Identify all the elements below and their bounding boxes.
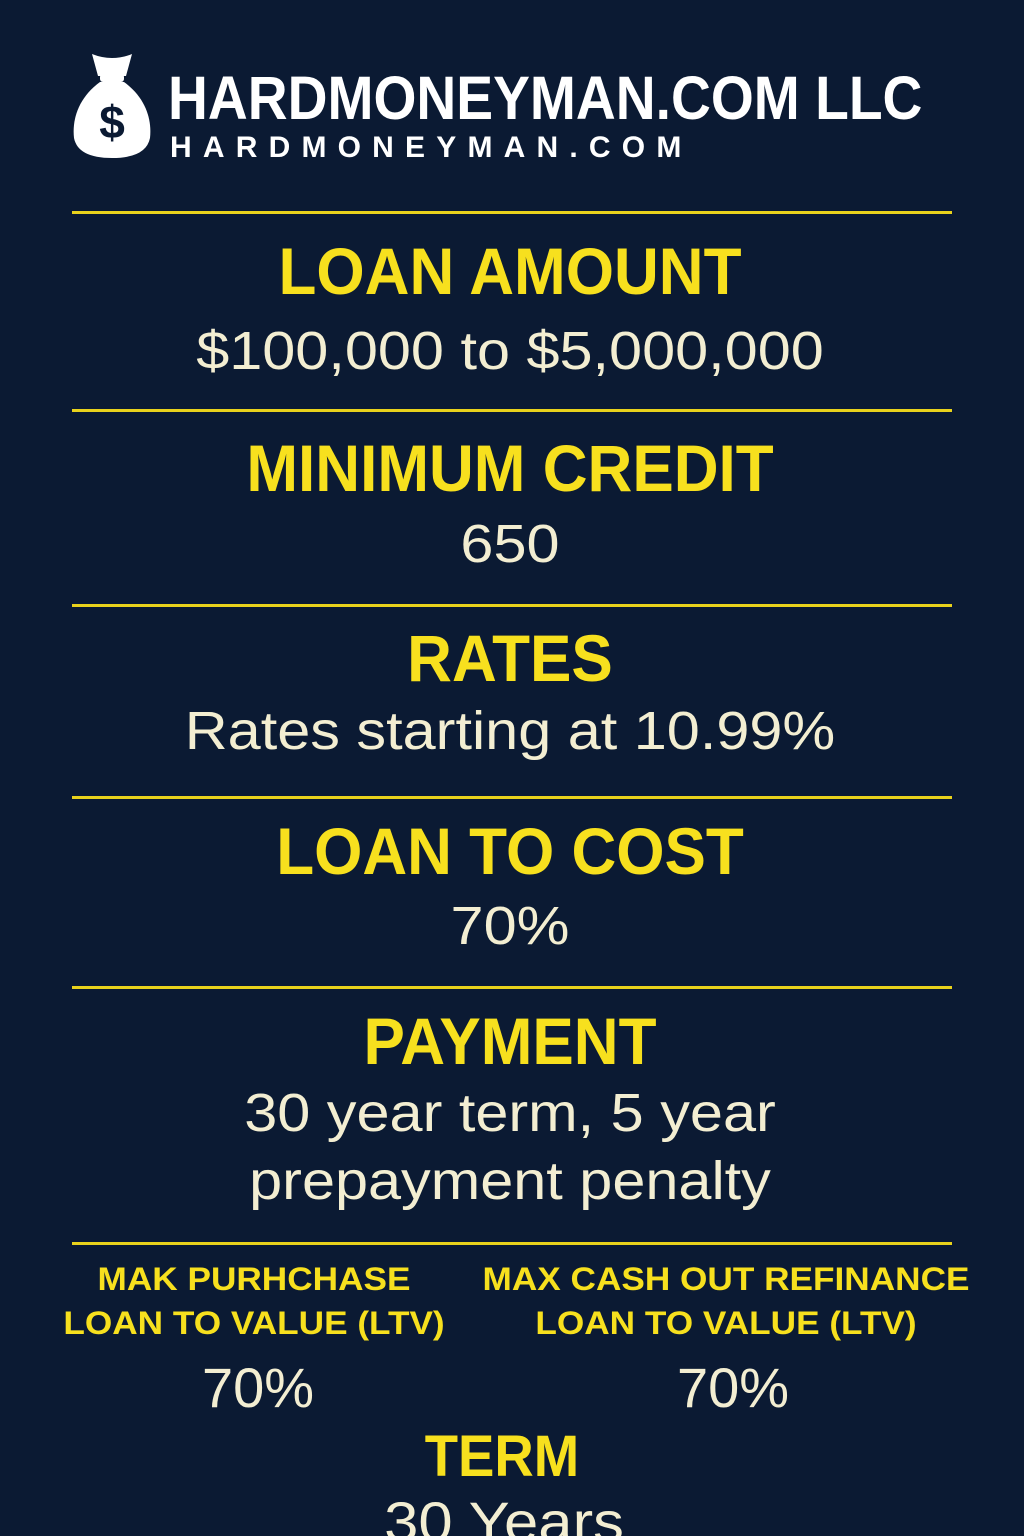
section: loan to cost: LOAN TO COST	[276, 814, 744, 888]
section: loan amount: LOAN AMOUNT	[279, 234, 741, 308]
value: payment	[244, 1083, 776, 1211]
refinance LTV value: 70%	[677, 1356, 789, 1419]
section: payment: PAYMENT	[363, 1004, 657, 1078]
refinance LTV heading: MAX CASH OUT REFINANCE	[483, 1261, 969, 1297]
section: minimum credit: MINIMUM CREDIT	[246, 431, 774, 505]
purchase LTV value: 70%	[202, 1356, 314, 1419]
subtitle: HARDMONEYMAN.COM	[170, 131, 693, 164]
section: rates: RATES	[407, 621, 613, 695]
purchase LTV heading: LOAN TO VALUE (LTV)	[63, 1305, 445, 1341]
icon: money bag: $	[99, 96, 125, 148]
title: HARDMONEYMAN.COM LLC	[168, 64, 922, 132]
section: term: TERM	[425, 1424, 579, 1489]
value: payment: prepayment penalty	[249, 1151, 771, 1211]
value: 650: 650	[460, 514, 560, 574]
value: 70%: 70%	[451, 896, 569, 956]
purchase LTV heading: MAK PURHCHASE	[98, 1261, 410, 1297]
value: loan amount: $100,000 to $5,000,000	[196, 321, 824, 381]
value: payment: 30 year term, 5 year	[244, 1083, 776, 1143]
purchase LTV heading	[63, 1261, 445, 1341]
refinance LTV heading: LOAN TO VALUE (LTV)	[535, 1305, 917, 1341]
value: rates: Rates starting at 10.99%	[185, 701, 835, 761]
refinance LTV heading	[483, 1261, 969, 1341]
icon: money bag	[74, 54, 150, 158]
